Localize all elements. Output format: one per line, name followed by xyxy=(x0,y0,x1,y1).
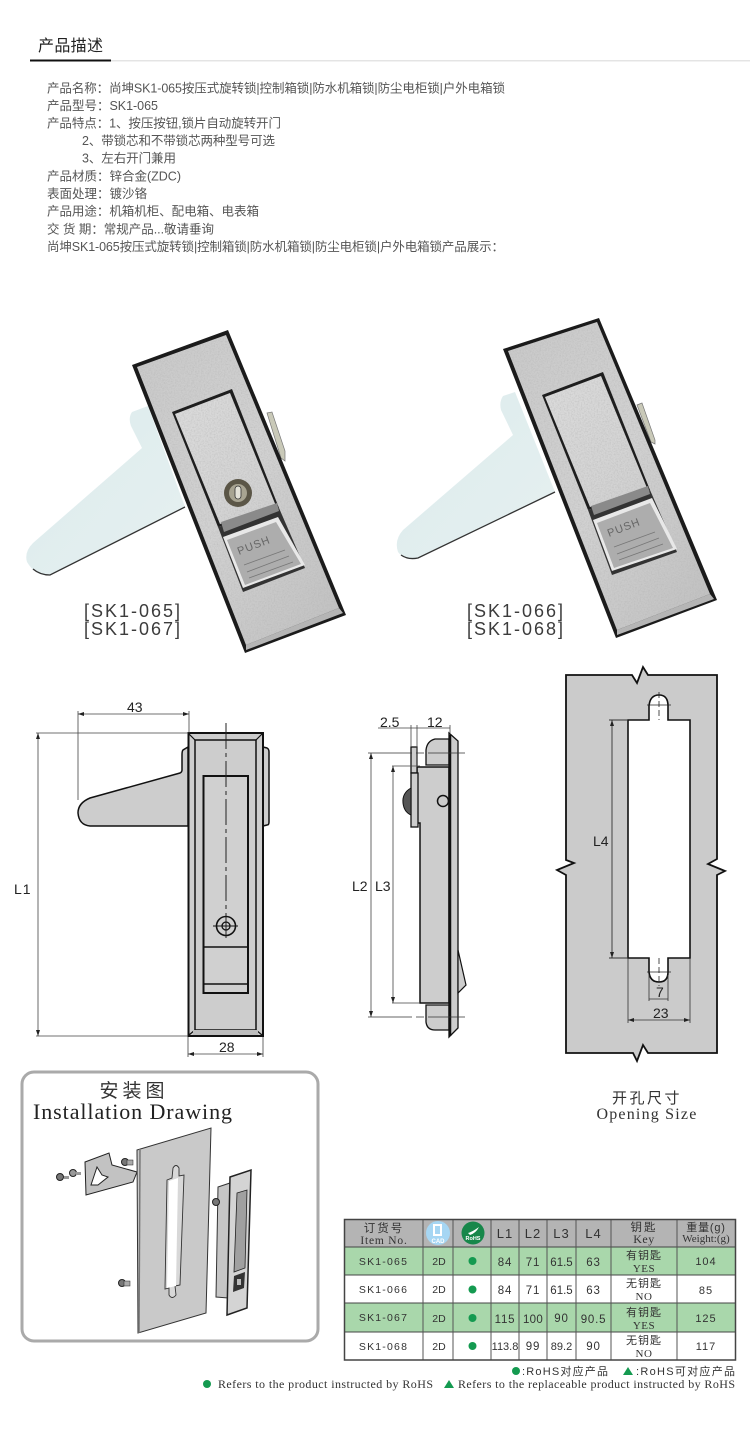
table row: SK1-068: 99 xyxy=(526,1341,540,1353)
dimension: 28: 28 xyxy=(219,1039,235,1055)
table row: SK1-068: 89.2 xyxy=(551,1341,572,1353)
table row: SK1-065: YES xyxy=(633,1263,655,1275)
table row: SK1-068: 无钥匙 xyxy=(626,1333,662,1347)
dimension: 2.5 and 12 xyxy=(378,714,450,767)
dimension: 2.5 and 12: 12 xyxy=(427,714,443,730)
table header row: L3 xyxy=(553,1226,570,1241)
table header row: Key xyxy=(633,1232,655,1246)
table row: SK1-066: 84 xyxy=(498,1285,512,1297)
table row: SK1-067: 有钥匙 xyxy=(626,1305,662,1319)
dimension: L2 xyxy=(352,753,465,1017)
table row: SK1-066: SK1-066 xyxy=(359,1284,408,1296)
table row: SK1-067: 115 xyxy=(495,1314,515,1326)
heading: product description: 产品描述 xyxy=(38,37,103,55)
illustration: door panel with cutout xyxy=(137,1128,211,1333)
dimension: 2.5 and 12: 2.5 xyxy=(380,714,400,730)
table row: SK1-067 xyxy=(359,1305,717,1332)
table row: SK1-067: 125 xyxy=(695,1313,717,1325)
legend: RoHS notes xyxy=(203,1364,735,1391)
technical drawing: opening size xyxy=(557,667,725,1061)
table row: SK1-066: NO xyxy=(636,1291,652,1303)
table row: SK1-067: SK1-067 xyxy=(359,1312,408,1324)
table: item specifications xyxy=(344,1219,736,1360)
dimension: L2: L2 xyxy=(352,878,368,894)
caption: SK1-066 / SK1-068: [SK1-066] xyxy=(467,601,563,621)
dimension: L3 xyxy=(375,766,420,1003)
legend: RoHS notes: :RoHS可对应产品 xyxy=(636,1364,735,1378)
caption: SK1-065 / SK1-067 xyxy=(84,601,180,639)
table row: SK1-066: 63 xyxy=(586,1285,601,1297)
text block: product specifications: 产品用途：机箱机柜、配电箱、电表箱 xyxy=(47,204,259,218)
table row: SK1-065: 61.5 xyxy=(550,1257,573,1269)
dimension: L4: L4 xyxy=(593,833,609,849)
icon: CAD: CAD xyxy=(432,1239,445,1245)
icon: RoHS xyxy=(462,1222,484,1244)
table row: SK1-067: 90 xyxy=(554,1313,569,1325)
table row: SK1-065: 63 xyxy=(586,1257,601,1269)
table row: SK1-065: 104 xyxy=(695,1256,717,1268)
dimension: 23 xyxy=(628,958,690,1023)
technical drawing: front view xyxy=(14,699,269,1057)
text block: product specifications: 产品型号：SK1-065 xyxy=(47,99,158,113)
table header row: Weight:(g) xyxy=(682,1233,730,1245)
dimension: 43 xyxy=(78,699,189,800)
heading: installation drawing: Installation Drawing xyxy=(33,1099,232,1124)
dimension: 7: 7 xyxy=(656,984,664,1000)
illustration: lock body xyxy=(212,1170,251,1315)
table row: SK1-066 xyxy=(359,1276,713,1303)
text block: product specifications: 3、左右开门兼用 xyxy=(82,150,176,166)
table header row xyxy=(360,1220,730,1247)
table header row: 订货号 xyxy=(364,1221,404,1235)
table header row: L2 xyxy=(525,1226,541,1241)
table row: SK1-067: 100 xyxy=(523,1314,543,1326)
dimension: 7 xyxy=(649,975,668,1001)
table row: SK1-066: 2D xyxy=(432,1284,446,1296)
legend: RoHS notes: Refers to the product instructed by RoHS xyxy=(218,1377,433,1391)
table row: SK1-065: 71 xyxy=(526,1257,540,1269)
table row: SK1-065: 2D xyxy=(432,1256,446,1268)
table row: SK1-066: 61.5 xyxy=(550,1285,573,1297)
table row: SK1-067: 90.5 xyxy=(581,1314,606,1326)
table row: SK1-068: SK1-068 xyxy=(359,1341,408,1353)
caption: opening size: 开孔尺寸 xyxy=(612,1090,682,1107)
text block: product specifications: 尚坤SK1-065按压式旋转锁|控制箱锁|防水机箱锁|防尘电柜锁|户外电箱锁产品展示： xyxy=(47,239,504,254)
table row: SK1-065: SK1-065 xyxy=(359,1256,408,1268)
table row: SK1-065: 有钥匙 xyxy=(626,1248,662,1262)
text block: product specifications: 产品材质：锌合金(ZDC) xyxy=(47,168,181,184)
text block: product specifications: 2、带锁芯和不带锁芯两种型号可选 xyxy=(82,133,275,148)
product photo: SK1-065 / SK1-067 with key xyxy=(26,330,346,653)
caption: opening size: Opening Size xyxy=(596,1106,698,1123)
text block: product specifications xyxy=(47,80,505,254)
product photo: SK1-066 / SK1-068 without key xyxy=(397,318,717,638)
table header row: Item No. xyxy=(360,1235,408,1247)
dimension: L3: L3 xyxy=(375,878,391,894)
caption: SK1-066 / SK1-068: [SK1-068] xyxy=(467,619,563,639)
illustration: bracket and screws xyxy=(56,1153,137,1286)
product photo: SK1-066 / SK1-068 without key: PUSH xyxy=(606,516,642,540)
product photo: SK1-065 / SK1-067 with key: PUSH xyxy=(236,534,272,558)
table header row: 钥匙 xyxy=(630,1220,658,1234)
panel: installation drawing xyxy=(22,1072,318,1341)
dimension: 28 xyxy=(188,1037,263,1057)
legend: RoHS notes: Refers to the replaceable product instructed by RoHS xyxy=(458,1377,735,1391)
table row: SK1-068 xyxy=(359,1333,716,1360)
table row: SK1-066: 无钥匙 xyxy=(626,1276,662,1290)
dimension: L1: L1 xyxy=(14,881,32,897)
caption: SK1-065 / SK1-067: [SK1-067] xyxy=(84,619,180,639)
table row: SK1-065: 84 xyxy=(498,1257,512,1269)
table row: SK1-065 xyxy=(359,1248,717,1275)
table row: SK1-066: 71 xyxy=(526,1285,540,1297)
table header row: L1 xyxy=(497,1226,513,1241)
heading: installation drawing: 安装图 xyxy=(99,1080,169,1102)
table row: SK1-068: NO xyxy=(636,1348,652,1360)
text block: product specifications: 产品名称：尚坤SK1-065按压式旋转锁|控制箱锁|防水机箱锁|防尘电柜锁|户外电箱锁 xyxy=(47,80,505,96)
table row: SK1-067: 2D xyxy=(432,1313,446,1325)
technical drawing: side view xyxy=(352,714,466,1037)
dimension: 43: 43 xyxy=(127,699,143,715)
table row: SK1-068: 117 xyxy=(696,1341,716,1353)
table header row: L4 xyxy=(585,1226,602,1241)
heading: installation drawing xyxy=(33,1080,232,1124)
icon: CAD xyxy=(426,1221,450,1245)
caption: SK1-065 / SK1-067: [SK1-065] xyxy=(84,601,180,621)
icon: RoHS: RoHS xyxy=(466,1236,481,1242)
text block: product specifications: 产品特点：1、按压按钮,锁片自动旋转开门 xyxy=(47,116,281,130)
legend: RoHS notes: :RoHS对应产品 xyxy=(522,1364,608,1378)
text block: product specifications: 交 货 期：常规产品...敬请垂询 xyxy=(47,222,214,236)
table row: SK1-066: 85 xyxy=(699,1285,713,1297)
table row: SK1-067: YES xyxy=(633,1320,655,1332)
table row: SK1-068: 90 xyxy=(586,1341,601,1353)
dimension: L4 xyxy=(593,720,628,958)
dimension: L1 xyxy=(14,733,188,1036)
caption: SK1-066 / SK1-068 xyxy=(467,601,563,639)
caption: opening size xyxy=(596,1090,698,1123)
text block: product specifications: 表面处理：镀沙铬 xyxy=(47,186,147,201)
table header row: 重量(g) xyxy=(686,1220,726,1234)
dimension: 23: 23 xyxy=(653,1005,669,1021)
table row: SK1-068: 113.8 xyxy=(492,1341,518,1353)
table row: SK1-068: 2D xyxy=(432,1341,446,1353)
